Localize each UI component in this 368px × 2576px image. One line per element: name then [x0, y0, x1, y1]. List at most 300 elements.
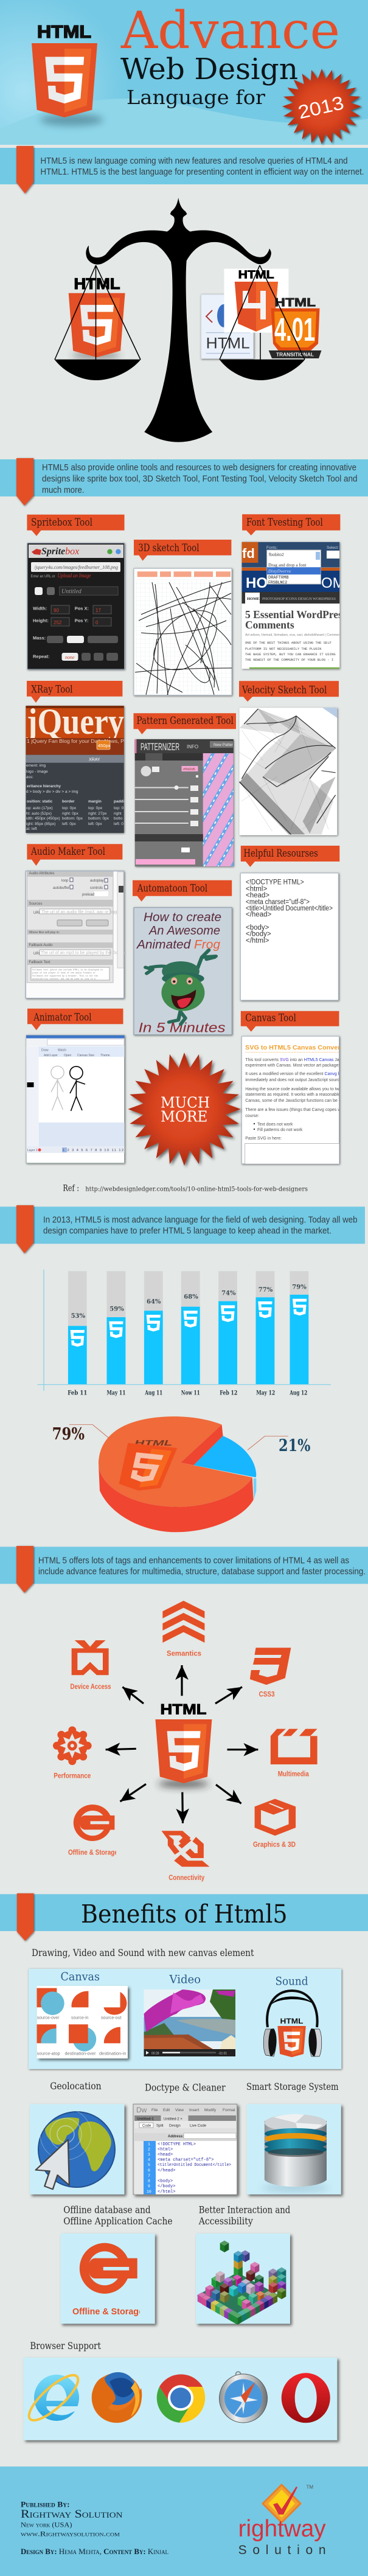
- tool label: spritebox: [27, 515, 125, 536]
- bar: Aug 12: 79%: [292, 1284, 307, 1290]
- bar: May 12: May 12: [256, 1390, 275, 1397]
- icon: graphics and 3d: [253, 1799, 296, 1848]
- icon: performance: Performance: [54, 1771, 91, 1780]
- panel: animator screenshot: Watch: [58, 1049, 66, 1053]
- panel: patternizer screenshot: [135, 739, 234, 866]
- panel: doctype code listing: <head>: [246, 892, 269, 899]
- benefits heading band: Benefits of Html5: [81, 1899, 288, 1929]
- panel: xray screenshot: idth: 450px (450px): [26, 816, 60, 821]
- panel: font testing screenshot: fbobito2: [269, 553, 284, 557]
- panel: canvas converter screenshot: course:: [245, 1114, 259, 1118]
- canvas demo: destination-in: [99, 2052, 127, 2056]
- panel: audio maker screenshot: Fallback Text: [29, 961, 50, 964]
- badge: much more: [128, 1053, 241, 1166]
- panel: dreamweaver doctype: <html>: [158, 2148, 173, 2153]
- bar: Feb 11: 53%: [71, 1313, 86, 1320]
- icon: internet explorer: [23, 2369, 84, 2426]
- panel: font testing screenshot: DRAFTRMB: [268, 576, 289, 580]
- panel: xray screenshot: paddi: [114, 799, 125, 804]
- canvas demo: destination-over: [64, 2052, 96, 2056]
- panel: animator screenshot: [26, 1036, 125, 1163]
- icon: connectivity: [161, 1831, 210, 1882]
- panel: canvas converter screenshot: experiment with Canvas. Most vector art packages: [245, 1063, 341, 1068]
- panel: font testing screenshot: DistyDwerva: [268, 569, 291, 574]
- left pan: html5: [55, 265, 141, 380]
- icon: semantics: [162, 1601, 204, 1658]
- sound demo: Sound: [275, 1975, 308, 1988]
- bar: Feb 12: [218, 1271, 237, 1397]
- panel: animated frog: In 5 Minutes: [139, 1020, 226, 1036]
- panel: animator screenshot: Layer 1: [27, 1149, 38, 1152]
- panel: animator screenshot: Theme: [100, 1054, 110, 1057]
- panel: dreamweaver doctype: Code: [142, 2125, 151, 2128]
- panel: font testing screenshot: HO: [246, 575, 268, 591]
- tool label: animator: Animator Tool: [33, 1011, 91, 1023]
- panel: doctype code listing: <html>: [246, 886, 267, 893]
- panel: dreamweaver doctype: Insert: [189, 2108, 199, 2112]
- panel: animator screenshot: Canvas Size: [77, 1054, 94, 1057]
- panel: xray screenshot: bottom: 0px: [88, 816, 109, 821]
- panel: audio maker screenshot: URL: [33, 911, 41, 915]
- panel: audio maker screenshot: loop: [61, 879, 69, 883]
- panel: xray screenshot: top: 0px: [62, 806, 77, 810]
- bar: Feb 12: 74%: [221, 1290, 236, 1297]
- tool label: automatoon: [133, 880, 232, 902]
- value: 79%: 79%: [52, 1425, 85, 1444]
- panel: dreamweaver doctype: </body>: [158, 2184, 175, 2189]
- icon: connectivity: Connectivity: [168, 1873, 204, 1882]
- panel: dreamweaver doctype: Split: [156, 2125, 164, 2128]
- bar: Now 11: [181, 1271, 200, 1397]
- panel: spritebox screenshot: Width:: [33, 606, 47, 611]
- panel: dreamweaver doctype: <meta charset="utf-8">: [158, 2157, 214, 2162]
- right pan: html4 logos: HTML: [274, 296, 316, 309]
- panel: dreamweaver doctype: <head>: [158, 2153, 173, 2157]
- bar: May 12: [255, 1271, 275, 1397]
- tool label: 3d sketch: 3D sketch Tool: [138, 542, 200, 554]
- publisher credits: Design By: Hema Mehta, Content By: Kinjal: [21, 2547, 168, 2556]
- panel: xray screenshot: left: 0px: [88, 822, 103, 826]
- panel: font testing screenshot: HOME: [247, 597, 260, 601]
- panel: audio maker screenshot: The url of an mp3 to be played by the Google: [41, 951, 127, 955]
- rightway logo: rightway: [238, 2516, 326, 2542]
- panel: patternizer screenshot: PATTERNIZER: [141, 741, 179, 753]
- title: Language for: [127, 86, 266, 109]
- canvas demo: [37, 1970, 128, 2058]
- tool label: velocity sketch: Velocity Sketch Tool: [241, 684, 327, 696]
- center html5 logo: HTML: [161, 1701, 207, 1718]
- title: Advance: [120, 1, 340, 60]
- heading: smart storage system: Smart Storage System: [246, 2081, 339, 2092]
- tool label: animator: [27, 1009, 123, 1030]
- publisher credits: New york (USA): [21, 2520, 72, 2529]
- ribbon band 4: HTML 5 offers lots of tags and enhancements to cover limitations of HTML 4 as well as: [38, 1556, 349, 1565]
- panel: font testing screenshot: THE BASE SYSTEM, BUT YOU CAN ENHANCE IT USING: [245, 652, 336, 656]
- panel: audio maker screenshot: The url of an audio file (mp3, aac or ogg): [41, 910, 118, 914]
- panel: xray screenshot: ht: auto (52px): [26, 812, 52, 816]
- bar: Feb 11: Feb 11: [68, 1390, 87, 1397]
- panel: audio maker screenshot: fallbacks are supported by a browser. This is not the: [32, 975, 98, 978]
- tool label: canvas: [241, 1011, 339, 1032]
- panel: canvas converter screenshot: statements as required. It works with a reasonable: [245, 1093, 340, 1097]
- tool label: helpful resources: [241, 846, 339, 867]
- video demo: [144, 1972, 235, 2056]
- rightway logo: [238, 2485, 326, 2557]
- panel: audio maker screenshot: Where files will play in:: [29, 931, 60, 935]
- bar: Now 11: Now 11: [181, 1390, 200, 1397]
- benefits heading band: [0, 1893, 368, 1941]
- heading: offline application cache: Offline Application Cache: [63, 2215, 173, 2227]
- panel: dreamweaver doctype: Address:: [168, 2135, 184, 2139]
- panel: dreamweaver doctype: 2: [148, 2148, 150, 2151]
- panel: xray screenshot: top: 0px: [88, 806, 103, 810]
- panel: spritebox screenshot: Mass:: [33, 635, 46, 641]
- bar: Feb 12: Feb 12: [220, 1390, 237, 1397]
- right pan: html4 logos: HTML: [238, 268, 274, 280]
- panel: audio maker screenshot: Fallback text (which can include HTML) to be displayed in: [32, 969, 103, 972]
- tool label: audio maker: [27, 844, 122, 866]
- panel: xray screenshot: d > body > div > div > a > img: [26, 790, 78, 794]
- header banner: [0, 0, 368, 145]
- panel: spritebox screenshot: /jquery4u.com/images/feedburner_108.png: [33, 564, 118, 570]
- reference url: Ref :: [63, 1183, 79, 1193]
- tool label: velocity sketch: [239, 681, 339, 701]
- tool label: font testing: [242, 514, 340, 535]
- bar: May 12: 77%: [259, 1287, 273, 1293]
- footer: [0, 2466, 368, 2576]
- panel: animated frog: [134, 908, 232, 1036]
- panel: xray screenshot: margin: [88, 799, 102, 804]
- badge: much more: MORE: [161, 1108, 207, 1125]
- panel: xray screenshot: right: 0px: [62, 812, 78, 816]
- panel: canvas converter screenshot: Fill patterns do not work: [257, 1128, 303, 1132]
- tool label: xray: XRay Tool: [31, 683, 73, 695]
- badge: 2013: [282, 69, 361, 144]
- panel: dreamweaver doctype: 5: [148, 2163, 150, 2167]
- panel: audio maker screenshot: URL: [33, 952, 41, 956]
- icon: offline and storage: Offline & Storage: [68, 1848, 118, 1857]
- bar: Aug 12: [289, 1271, 308, 1397]
- panel: font testing screenshot: [241, 542, 347, 669]
- panel: dreamweaver doctype: 9: [148, 2184, 150, 2188]
- sound demo: HTML: [280, 2017, 303, 2025]
- title: Web Design: [120, 52, 298, 86]
- rightway logo: TM: [307, 2485, 313, 2490]
- ribbon band 3: [0, 1205, 365, 1253]
- icon: opera: [282, 2373, 330, 2423]
- panel: xray screenshot: 450px: [98, 743, 111, 748]
- panel: dreamweaver doctype: 6: [148, 2168, 150, 2173]
- heading: browser support: Browser Support: [30, 2340, 101, 2351]
- bar: May 11: [107, 1271, 125, 1397]
- panel: dreamweaver doctype: <!DOCTYPE HTML>: [158, 2142, 196, 2147]
- panel: dreamweaver doctype: 8: [148, 2179, 150, 2183]
- panel: audio maker screenshot: autoplay: [90, 879, 104, 883]
- panel: xray screenshot: top: 0: [114, 806, 124, 810]
- icon: device access: [71, 1640, 111, 1691]
- ribbon band 1: [0, 146, 368, 193]
- panel: doctype code listing: </head>: [246, 911, 271, 919]
- ribbon band 1: HTML5 is new language coming with new features and resolve queries of HTML4 and: [40, 156, 348, 166]
- reference url: http://webdesignledger.com/tools/10-online-html5-tools-for-web-designers: [85, 1185, 308, 1192]
- heading: accessibility: Accessibility: [198, 2215, 253, 2227]
- panel: xray screenshot: ement: img: [26, 764, 46, 768]
- badge: 2013: 2013: [296, 92, 346, 123]
- panel: animator screenshot: Open: [64, 1054, 71, 1057]
- canvas demo: Canvas: [61, 1970, 100, 1983]
- tool label: canvas: Canvas Tool: [245, 1012, 296, 1024]
- html5 logo: HTML: [37, 23, 91, 42]
- panel: canvas converter screenshot: There are a few issues (things that Canvg copes wi: [245, 1108, 342, 1112]
- panel: font testing screenshot: Fonts:: [266, 546, 277, 550]
- panel: font testing screenshot: Art wilson, Hemali, Ibrinaben, eva, sari, disholdtheant | Comments: [245, 633, 343, 637]
- panel: interaction cubes: [196, 2233, 290, 2325]
- panel: doctype code listing: <!DOCTYPE HTML>: [246, 879, 304, 886]
- panel: dreamweaver doctype: 3: [148, 2153, 150, 2157]
- tool label: pattern generated: Pattern Generated Tool: [136, 715, 234, 727]
- icon: multimedia: Multimedia: [278, 1769, 309, 1778]
- panel: doctype code listing: <title>Untitled Document</title>: [246, 905, 333, 913]
- panel: font testing screenshot: PHOTOSHOP ICONS DESIGN WORDPRESS: [262, 597, 336, 601]
- panel: velocity sketch mesh: [240, 708, 337, 835]
- panel: xray screenshot: op: auto (17px): [26, 806, 53, 810]
- panel: spritebox screenshot: 252: [54, 620, 62, 625]
- bar: Now 11: 68%: [184, 1293, 198, 1300]
- panel: dreamweaver doctype: Live Code: [190, 2125, 207, 2128]
- panel: font testing screenshot: PLATFORM IS NOT NECESSARILY THE PLUGIN: [245, 647, 321, 651]
- panel: doctype code listing: [240, 873, 338, 1000]
- center html5 logo: [155, 1701, 212, 1788]
- panel: canvas converter screenshot: Canvas, some of the JavaScript functions can be o: [245, 1099, 341, 1103]
- tool label: font testing: Font Tvesting Tool: [246, 517, 323, 529]
- tool label: helpful resources: Helpful Resourses: [243, 848, 318, 860]
- publisher credits: Rightway Solution: [21, 2508, 123, 2521]
- panel: font testing screenshot: OM: [321, 575, 345, 591]
- panel: xray screenshot: ass:: [26, 775, 33, 779]
- pie chart: HTML: [133, 1438, 174, 1447]
- panel: spritebox screenshot: [27, 543, 124, 669]
- panel: dreamweaver doctype: Format: [223, 2108, 235, 2112]
- canvas demo: source-over: [37, 2016, 60, 2020]
- panel: audio maker screenshot: accessibility content, but can be used to link to a: [32, 978, 95, 981]
- right pan: html4 logos: [201, 265, 321, 380]
- panel: xray screenshot: left: 0px: [62, 822, 77, 826]
- tool label: automatoon: Automatoon Tool: [137, 882, 207, 894]
- panel: font testing screenshot: ONE OF THE BEST THINGS ABOUT USING THE SELF: [245, 641, 332, 645]
- html5 logo: [32, 23, 103, 126]
- panel: dreamweaver doctype: Edit: [163, 2108, 170, 2112]
- panel: spritebox screenshot: none: [65, 655, 75, 660]
- panel: patternizer screenshot: INFO: [187, 744, 198, 750]
- panel: patternizer screenshot: New Patter: [214, 743, 234, 747]
- heading: drawing video sound: Drawing, Video and Sound with new canvas element: [32, 1947, 254, 1958]
- video demo: Video: [169, 1972, 201, 1986]
- panel: animated frog: An Awesome: [148, 924, 220, 938]
- bar: May 11: 59%: [109, 1306, 124, 1313]
- panel: audio maker screenshot: preload: [82, 893, 94, 897]
- canvas demo: source-in: [71, 2016, 89, 2020]
- panel: dreamweaver doctype: Untitled-2 ×: [164, 2117, 182, 2121]
- panel: animated frog: Animated Frog: [136, 938, 220, 952]
- icon: firefox: [92, 2372, 142, 2423]
- panel: audio maker screenshot: Sources: [29, 902, 43, 906]
- panel: spritebox screenshot: Height:: [33, 618, 49, 624]
- panel: xray screenshot: bottom: 0px: [62, 816, 83, 821]
- panel: spritebox screenshot: 90: [54, 608, 59, 613]
- panel: doctype code listing: <meta charset="utf-8">: [246, 899, 310, 906]
- canvas demo: source-atop: [37, 2052, 60, 2056]
- panel: audio maker screenshot: Audio Attributes: [29, 872, 55, 875]
- panel: xray screenshot: XRAY: [89, 758, 100, 762]
- tool label: 3d sketch: [134, 540, 231, 561]
- sound demo: [263, 1975, 322, 2057]
- panel: dreamweaver doctype: 1: [148, 2142, 150, 2146]
- panel: animator screenshot: Draw: [41, 1049, 49, 1053]
- panel: canvas video sound: [29, 1969, 341, 2069]
- panel: audio maker screenshot: autobuffer: [53, 886, 69, 890]
- icon: css3: CSS3: [259, 1690, 275, 1698]
- panel: font testing screenshot: 5 Essential WordPress: [245, 608, 347, 621]
- panel: dreamweaver doctype: Design: [169, 2125, 181, 2128]
- panel: dreamweaver doctype: 10: [147, 2190, 151, 2194]
- panel: xray screenshot: jQuery: [26, 701, 124, 742]
- feature diagram: [53, 1601, 318, 1882]
- panel: smart storage cylinder: [247, 2104, 341, 2195]
- icon: offline and storage: [68, 1805, 118, 1857]
- panel: spritebox screenshot: Untitled: [61, 588, 82, 595]
- panel: patternizer screenshot: #f9d2d5: [183, 768, 195, 771]
- panel: animator screenshot: Add Layer: [44, 1054, 58, 1057]
- panel: xray screenshot: [26, 701, 125, 833]
- panel: xray screenshot: right: 27px: [88, 812, 107, 816]
- panel: dreamweaver doctype: Untitled-1: [137, 2117, 154, 2121]
- tool label: spritebox: Spritebox Tool: [31, 517, 92, 529]
- balance scale silhouette: [86, 198, 271, 442]
- right pan: html4 logos: 4.01: [274, 312, 315, 348]
- bar: Aug 11: Aug 11: [144, 1390, 162, 1397]
- panel: dreamweaver doctype: 7: [148, 2174, 150, 2178]
- icon: css3: [250, 1648, 291, 1698]
- canvas demo: source-out: [101, 2016, 122, 2020]
- panel: font testing screenshot: THE NEWEST OF THE COMMUNITY OF YOUR BLOG - I: [245, 658, 333, 662]
- panel: canvas converter screenshot: immediately and does not output JavaScript source: [245, 1078, 342, 1082]
- panel: dreamweaver doctype: </head>: [158, 2168, 175, 2173]
- panel: xray screenshot: logo - image: [26, 770, 48, 774]
- panel: audio maker screenshot: Fallback Audio: [29, 944, 53, 947]
- bar: Aug 12: Aug 12: [289, 1390, 307, 1397]
- panel: font testing screenshot: fd: [242, 546, 255, 561]
- tool label: audio maker: Audio Maker Tool: [30, 846, 105, 858]
- heading: better interaction: Better Interaction and: [199, 2204, 290, 2216]
- bar: May 11: May 11: [107, 1390, 125, 1397]
- bar: Aug 11: 64%: [147, 1299, 161, 1306]
- arrows: [106, 1665, 258, 1823]
- panel: offline and storage: [61, 2233, 155, 2324]
- rightway logo: Solution: [238, 2543, 326, 2557]
- panel: canvas converter screenshot: This tool converts SVG into an HTML5 Canvas JavaS: [245, 1058, 347, 1062]
- ribbon band 4: [0, 1546, 368, 1593]
- panel: xray screenshot: border: [62, 799, 75, 804]
- pie chart: [52, 1416, 310, 1532]
- panel: dreamweaver doctype: File: [151, 2108, 158, 2112]
- panel: font testing screenshot: Select:: [327, 546, 339, 550]
- panel: animated frog: How to create: [144, 911, 221, 924]
- right pan: html4 logos: HTML: [206, 335, 250, 352]
- bar: Aug 11: [144, 1271, 163, 1397]
- panel: xray screenshot: 1 jQuery Fan Blog for your Daily News, P: [27, 738, 124, 744]
- panel: xray screenshot: right: [114, 812, 122, 816]
- publisher credits: www.Rightwaysolution.com: [21, 2530, 120, 2538]
- panel: font testing screenshot: Drag and drop a font: [268, 562, 307, 568]
- ribbon band 2: [0, 458, 368, 506]
- panel: animator screenshot: 1 2 3 4 5 6 7 8 9 10 11 12: [63, 1149, 123, 1152]
- panel: dreamweaver doctype: Modify: [204, 2108, 217, 2112]
- bar: Feb 11: [68, 1271, 87, 1397]
- panel: spritebox screenshot: Pos X:: [75, 606, 89, 611]
- publisher credits: Published By:: [21, 2500, 70, 2509]
- panel: geolocation: [30, 2104, 124, 2195]
- panel: font testing screenshot: Comments: [245, 619, 294, 631]
- bar chart: [38, 1270, 331, 1397]
- panel: dreamweaver doctype: <title>Untitled Document</title>: [158, 2163, 231, 2168]
- icon: semantics: Semantics: [167, 1649, 201, 1658]
- panel: xray screenshot: osition: static: [27, 799, 53, 804]
- panel: spritebox screenshot: Repeat:: [33, 654, 50, 660]
- panel: canvas converter screenshot: It uses a modified version of the excellent Canvg lib: [245, 1072, 342, 1076]
- panel: dreamweaver doctype: <body>: [158, 2179, 173, 2184]
- panel: canvas converter screenshot: Text does not work: [257, 1123, 293, 1127]
- icon: graphics and 3d: Graphics & 3D: [253, 1840, 296, 1848]
- title: [120, 1, 340, 109]
- panel: canvas converter screenshot: [241, 1036, 349, 1168]
- panel: dreamweaver doctype: </html>: [158, 2190, 175, 2195]
- icon: chrome: [157, 2375, 205, 2423]
- ribbon band 2: much more.: [42, 486, 84, 495]
- badge: much more: MUCH: [161, 1095, 210, 1112]
- panel: dreamweaver doctype: [133, 2104, 237, 2195]
- panel: audio maker screenshot: [26, 871, 127, 998]
- video demo: -01:01: [218, 2052, 227, 2055]
- panel: spritebox screenshot: 0: [95, 620, 99, 625]
- panel: spritebox screenshot: Spritebox: [41, 546, 79, 557]
- video demo: 00:28: [151, 2052, 159, 2055]
- panel: doctype code listing: </html>: [246, 937, 269, 944]
- icon: performance: [53, 1727, 92, 1780]
- panel: font testing screenshot: FRSBLNC2: [268, 580, 287, 585]
- icon: multimedia: [271, 1729, 318, 1778]
- panel: xray screenshot: botto: [114, 816, 123, 821]
- publisher credits: [21, 2500, 168, 2556]
- right pan: html4 logos: TRANSITIONAL: [276, 352, 314, 358]
- panel: browser support: [23, 2358, 337, 2440]
- ribbon band 3: design companies have to prefer HTML 5 language to keep ahead in the market.: [43, 1227, 332, 1236]
- icon: safari: [219, 2372, 268, 2423]
- reference url: [63, 1183, 308, 1193]
- panel: dreamweaver doctype: 4: [148, 2157, 150, 2162]
- panel: dreamweaver doctype: View: [175, 2108, 184, 2112]
- panel: xray screenshot: eritance hierarchy: [27, 784, 61, 788]
- value: 21%: 21%: [279, 1436, 310, 1455]
- panel: audio maker screenshot: place of the player if none of the audio formats or: [32, 972, 95, 975]
- panel: spritebox screenshot: Enter an URL or: [30, 574, 55, 579]
- panel: xray screenshot: ight: 85px (85px): [26, 822, 55, 826]
- heading: offline database: Offline database and: [63, 2204, 151, 2216]
- heading: geolocation: Geolocation: [50, 2080, 102, 2092]
- left pan: html5: HTML: [74, 276, 120, 293]
- panel: doctype code listing: </body>: [246, 931, 271, 938]
- panel: spritebox screenshot: 17: [95, 608, 101, 613]
- panel: canvas converter screenshot: SVG to HTML5 Canvas Converter: [245, 1044, 349, 1051]
